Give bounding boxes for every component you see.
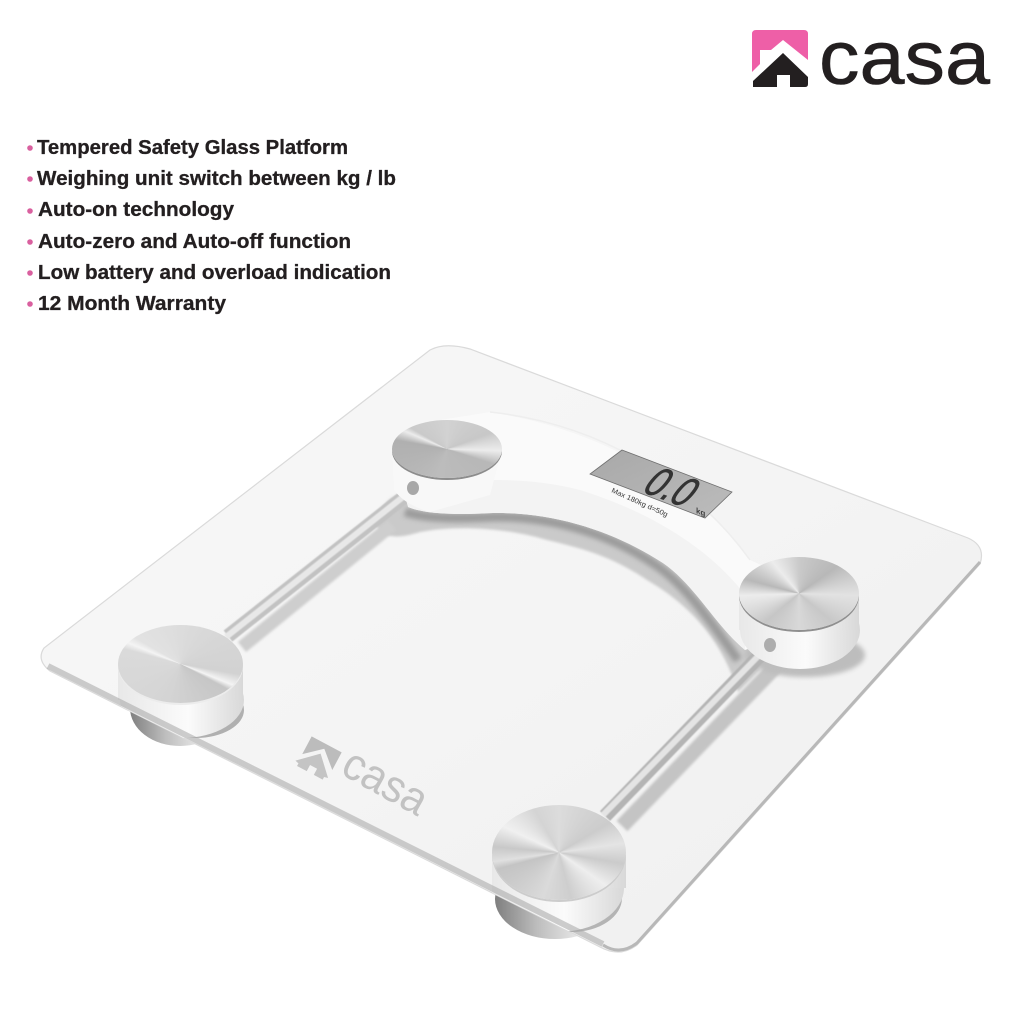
casa logo bbox=[752, 16, 991, 101]
capacity label: Max 180kg d=50g bbox=[610, 487, 669, 519]
metal disc: top left bbox=[392, 420, 502, 478]
bullet 1: Tempered Safety Glass Platform bbox=[37, 137, 348, 159]
rod end caps bbox=[407, 481, 776, 652]
bullet 6: 12 Month Warranty bbox=[38, 293, 227, 315]
metal disc: left bbox=[118, 625, 243, 703]
feature list bbox=[27, 137, 396, 315]
bullet 5: Low battery and overload indication bbox=[38, 262, 391, 284]
LCD display bbox=[590, 450, 732, 519]
arc body bbox=[400, 412, 860, 650]
rods bbox=[226, 489, 770, 816]
bullet 4: Auto-zero and Auto-off function bbox=[38, 231, 351, 253]
bullet 3: Auto-on technology bbox=[38, 199, 235, 221]
LCD unit: kg bbox=[696, 506, 705, 518]
LCD reading: 0.0 bbox=[634, 459, 711, 515]
glass platform bbox=[41, 346, 982, 952]
shadows on glass bbox=[242, 495, 865, 826]
metal disc: bottom bbox=[492, 805, 626, 900]
bullet 2: Weighing unit switch between kg / lb bbox=[37, 168, 396, 190]
glass edge over feet bbox=[48, 562, 980, 950]
metal disc: right bbox=[739, 557, 859, 630]
logo icon: house bbox=[753, 53, 808, 87]
logo wordmark: casa bbox=[819, 16, 991, 101]
glass watermark logo bbox=[294, 735, 438, 826]
logo icon: pink square bbox=[752, 30, 808, 72]
watermark wordmark: casa bbox=[334, 737, 438, 826]
feet under glass bbox=[130, 670, 615, 939]
scale base: glass, shadows, rods, bodies bbox=[40, 345, 982, 953]
disc bodies bbox=[118, 450, 860, 932]
